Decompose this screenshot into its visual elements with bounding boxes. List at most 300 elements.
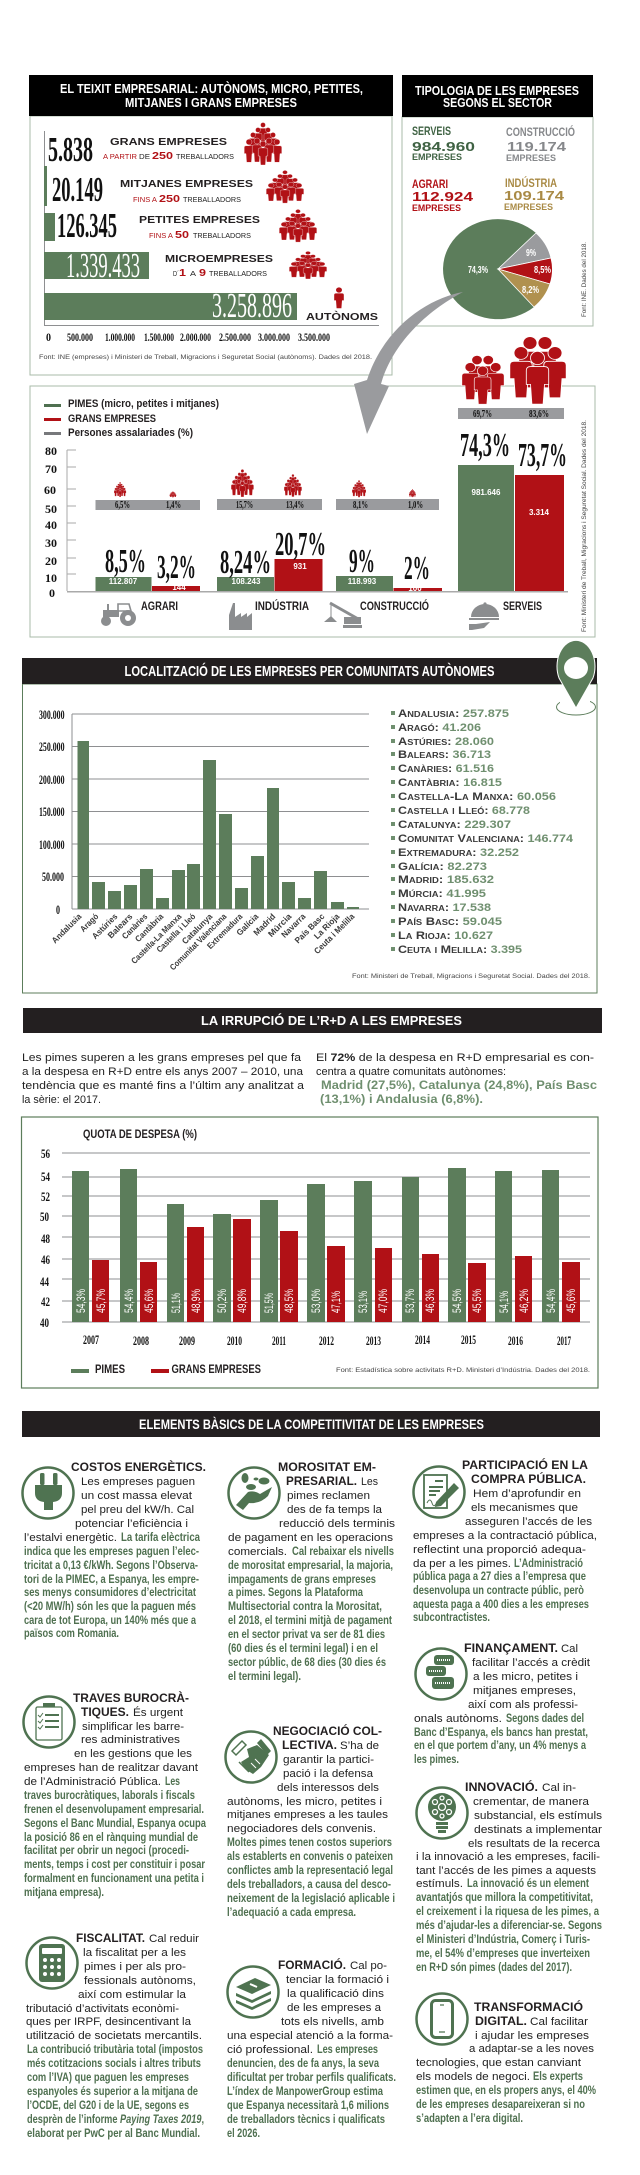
bar chart: pimes vs grans: 2007 [83, 1332, 99, 1347]
block: negociació col·lectiva: garantir la partici- [283, 1754, 374, 1766]
label: mitjanes empreses: 250 [159, 194, 181, 205]
bar chart: pimes vs grans: 45,6% [564, 1289, 578, 1313]
bar chart: empreses per comunitat: Ceuta i Melilla [312, 911, 357, 956]
block: traves burocràtiques: És urgent [133, 1706, 184, 1719]
legend [44, 398, 219, 439]
bar chart: pimes vs grans: 44 [40, 1274, 49, 1289]
stat: indústria: EMPRESES [504, 202, 553, 212]
text: intro esquerra: la sèrie: el 2017. [22, 1094, 101, 1106]
icon: crowd microempreses [289, 251, 327, 279]
icon: handshake [226, 1732, 276, 1782]
block: compra pública: Hem d’aprofundir en [473, 1488, 581, 1500]
group: indústria: 13,4% [286, 499, 304, 511]
heading band: irrupció R+D [23, 1008, 602, 1033]
block: fiscalitat: utilització de societats mercantils. [26, 2030, 202, 2042]
group: indústria: 15,7% [236, 499, 253, 511]
icon: cloche and hand [469, 602, 499, 630]
bar chart: empreses per comunitat [39, 707, 369, 972]
block: fiscalitat: FISCALITAT. [76, 1932, 145, 1945]
label: mitjanes empreses: TREBALLADORS [183, 197, 241, 204]
block: transformació digital: s’adapten a l’era digital. [416, 2111, 523, 2125]
bar chart: pimes vs grans: 54,4% [544, 1289, 558, 1313]
bar chart: pimes vs grans: 53,7% [403, 1289, 417, 1313]
group: serveis: 69,7% [473, 408, 492, 420]
block: compra pública: PARTICIPACIÓ EN LA [462, 1459, 589, 1472]
block: negociació col·lectiva: NEGOCIACIÓ COL- [273, 1725, 382, 1738]
heading: teixit empresarial: MITJANES I GRANS EMPRESES [125, 96, 297, 110]
icon: plug [22, 1468, 74, 1518]
label: grans empreses: A PARTIR [103, 154, 137, 161]
bar chart: pimes vs grans: 45,7% [94, 1289, 108, 1313]
block: negociació col·lectiva: autònoms, les micro, petites i [227, 1796, 382, 1808]
block: costos energètics: La tarifa elèctrica [121, 1530, 200, 1544]
block: morositat: MOROSITAT EM- [278, 1461, 376, 1474]
bar chart: pimes vs grans: 48,5% [282, 1289, 296, 1313]
icon: smartphone [416, 1994, 468, 2044]
list: empreses per comunitat: La Rioja: 10.627 [398, 930, 493, 942]
block: costos energètics: Les empreses paguen [81, 1476, 195, 1488]
block: morositat: el termini legal). [228, 1669, 301, 1683]
block: negociació col·lectiva: mitjanes empreses a les taules [227, 1809, 388, 1821]
list: empreses per comunitat: Madrid: 185.632 [398, 874, 494, 886]
label: grans empreses: GRANS EMPRESES [110, 136, 227, 148]
block: formació: Les empreses [317, 2042, 378, 2056]
label: grans empreses: 250 [152, 151, 174, 162]
block: fiscalitat: ques per IRPF, desincentivant la [26, 2016, 192, 2028]
block: fiscalitat: així com estimular la [78, 1989, 187, 2001]
block: innovació: crementar, de manera [473, 1796, 590, 1808]
heading band: elements bàsics: ELEMENTS BÀSICS DE LA COMPETITIVITAT DE LES EMPRESES [139, 1417, 484, 1432]
bar chart: empreses per grandària [44, 130, 379, 344]
block: traves burocràtiques: ments, temps i cost per constituir i posar [24, 1857, 205, 1871]
block: transformació digital: els models de negoci. [416, 2071, 530, 2083]
list: empreses per comunitat: Comunitat Valenciana: 146.774 [398, 833, 574, 845]
stat: construcció: EMPRESES [506, 153, 556, 163]
list: empreses per comunitat: Ceuta i Melilla: 3.395 [398, 944, 522, 956]
block: fiscalitat: tributació d’activitats econòmi- [26, 2003, 179, 2015]
block: negociació col·lectiva [226, 1725, 395, 1919]
stat: agrari [412, 177, 474, 213]
block: innovació: destinats a implementar [474, 1824, 602, 1836]
legend: PIMES [95, 1364, 125, 1376]
block: traves burocràtiques: res administratives [81, 1734, 180, 1746]
bar chart: pimes vs grans: 45,6% [142, 1289, 156, 1313]
block: traves burocràtiques [24, 1692, 206, 1899]
group: indústria: INDÚSTRIA [255, 600, 309, 613]
label: mitjanes empreses: MITJANES EMPRESES [120, 178, 253, 190]
bar chart: pimes vs grans: 2015 [461, 1332, 476, 1347]
list: empreses per comunitat: País Basc: 59.045 [398, 916, 502, 928]
y axis: 80 [45, 444, 57, 458]
block: negociació col·lectiva: als establerts en convenis o pateixen [227, 1849, 393, 1863]
block: morositat: Les [361, 1476, 378, 1488]
bar chart: empreses per grandària: 500.000 [67, 330, 93, 344]
group: agrari: 3,2% [157, 549, 196, 586]
bar chart: empreses per comunitat: Castella i Lleó [154, 911, 197, 954]
group: construcció: 2% [404, 550, 430, 587]
label: microempreses: A [190, 271, 196, 278]
pie chart: 9% [526, 247, 536, 259]
list: empreses per comunitat: Extremadura: 32.252 [398, 847, 519, 859]
list: empreses per comunitat: Canàries: 61.516 [398, 763, 494, 775]
block: compra pública: L’Administració [514, 1556, 583, 1570]
text: intro esquerra: Les pimes superen a les grans empreses pel que fa [22, 1052, 302, 1064]
icon: crowd grans empreses [244, 122, 282, 165]
block: costos energètics: potenciar l’eficiència i [75, 1518, 188, 1530]
group: construcció: 8,1% [353, 499, 368, 511]
block: morositat: a pimes. Segons la Plataforma [228, 1585, 363, 1599]
label: autònoms: AUTÒNOMS [306, 310, 378, 323]
bar chart: pimes vs grans: 53,0% [309, 1289, 323, 1313]
block: innovació [416, 1781, 602, 1974]
block: formació: una especial atenció a la forma- [227, 2030, 393, 2042]
block: negociació col·lectiva: pació i la defensa [283, 1768, 374, 1780]
block: traves burocràtiques: empreses han de realitzar davant [24, 1762, 199, 1774]
block: finançament: les pimes. [414, 1752, 459, 1766]
group: agrari: AGRARI [141, 601, 178, 613]
bar chart: empreses per comunitat: La Rioja [312, 911, 342, 941]
block: formació: tots els nivells, amb [281, 2016, 384, 2028]
heading: tipologia: TIPOLOGIA DE LES EMPRESES [415, 84, 579, 98]
label: grans empreses: TREBALLADORS [176, 154, 234, 161]
block: negociació col·lectiva: dels treballadors, a causa del desco- [227, 1877, 391, 1891]
block: formació: de les empreses a [287, 2002, 382, 2014]
block: morositat: comercials. [228, 1546, 287, 1558]
group: construcció: 9% [349, 543, 375, 580]
bar chart: empreses per comunitat: Aragó [78, 911, 100, 934]
group: agrari: 8,5% [105, 543, 146, 580]
block: fiscalitat: espanyoles és superior a la mitjana de [27, 2084, 198, 2098]
block: morositat: des de fa temps la [287, 1504, 383, 1516]
block: finançament: a les micro, petites i [473, 1671, 578, 1683]
label: microempreses: D´ [173, 271, 179, 278]
group: indústria: 8,24% [220, 544, 271, 581]
bar chart: empreses per comunitat: Extremadura [205, 911, 245, 951]
bar chart: empreses per comunitat: Catalunya [180, 911, 215, 946]
list: empreses per comunitat [391, 708, 574, 956]
block: traves burocràtiques: simplificar les barre- [82, 1721, 184, 1733]
legend: PIMES (micro, petites i mitjanes) [68, 398, 219, 410]
block: formació: L’índex de ManpowerGroup estima [227, 2084, 383, 2098]
block: fiscalitat: Cal reduir [149, 1933, 199, 1945]
label: mitjanes empreses [120, 178, 253, 205]
bar chart: pimes vs grans: 2009 [179, 1333, 195, 1348]
bar chart: pimes vs grans: 50 [40, 1209, 49, 1224]
block: traves burocràtiques: en les gestions que les [74, 1748, 192, 1760]
block: formació: FORMACIÓ. [278, 1959, 346, 1972]
stat: serveis: 984.960 [412, 139, 475, 154]
block: formació: Cal po- [350, 1960, 387, 1972]
heading: teixit empresarial [60, 81, 363, 110]
bar chart: empreses per grandària: 1.339.433 [66, 246, 140, 285]
group: indústria: 20,7% [275, 526, 326, 563]
icon: factory [229, 603, 252, 630]
bar chart: pimes vs grans: 54 [41, 1169, 50, 1184]
block: formació: ció professional. [227, 2044, 313, 2056]
bar chart: pimes vs grans [40, 1146, 590, 1348]
block: formació: el 2026. [227, 2126, 260, 2140]
icon: crowd petites empreses [279, 209, 317, 242]
bar chart: pimes vs grans: 54,4% [122, 1289, 136, 1313]
arrow: from pie to sector chart [354, 292, 463, 434]
block: traves burocràtiques: Les [165, 1774, 180, 1788]
bar chart: empreses per comunitat: Comunitat Valenciana [168, 911, 229, 972]
block: finançament: mitjanes empreses, [473, 1685, 576, 1697]
block: transformació digital [416, 1994, 596, 2125]
block: negociació col·lectiva: Moltes pimes tenen costos superiors [227, 1835, 392, 1849]
list: empreses per comunitat: Castella-La Manxa: 60.056 [398, 791, 556, 803]
stat: construcció: CONSTRUCCIÓ [506, 124, 575, 139]
bar chart: pimes vs grans: 46,3% [423, 1289, 437, 1313]
block: costos energètics: pel preu del kW/h. Cal [81, 1504, 194, 1516]
bar chart: empreses per comunitat: Castella-La Manxa [129, 911, 184, 966]
bar chart: pimes vs grans: 51,5% [262, 1293, 276, 1313]
block: transformació digital: de les empreses desapareixeran si no [416, 2097, 585, 2111]
block: morositat: de pagament en les operacions [228, 1532, 393, 1544]
bar chart: empreses per comunitat: 150.000 [39, 804, 64, 819]
block: morositat: el 2018, el termini mitjà de pagament [228, 1613, 392, 1627]
bar chart: empreses per grandària: 2.500.000 [219, 330, 251, 344]
list: empreses per comunitat: Balears: 36.713 [398, 749, 491, 761]
block: negociació col·lectiva: l’adequació a cada empresa. [227, 1905, 356, 1919]
bar chart: empreses per comunitat: 300.000 [39, 707, 64, 722]
block: transformació digital: Els experts [533, 2069, 583, 2083]
label: petites empreses: 50 [175, 230, 190, 241]
bar chart: empreses per comunitat: Madrid [251, 911, 277, 938]
bar chart: empreses per comunitat: Balears [105, 911, 135, 940]
group: construcció: 118.993 [348, 577, 377, 586]
block: costos energètics: indica que les empreses paguen l’elec- [24, 1544, 199, 1558]
block: costos energètics: COSTOS ENERGÈTICS. [71, 1461, 206, 1474]
bar chart: empreses per grandària: 1.500.000 [144, 330, 174, 344]
list: empreses per comunitat: Andalusia: 257.875 [398, 708, 509, 720]
y axis [44, 444, 76, 600]
panel: quota de despesa [22, 1117, 598, 1388]
block: innovació: en R+D són pimes (dades del 2017). [416, 1960, 572, 1974]
group: agrari: 144 [172, 583, 186, 592]
bar chart: empreses per comunitat: 100.000 [39, 837, 64, 852]
block: transformació digital: i ajudar les empreses [475, 2030, 589, 2042]
block: innovació: La innovació és un element [467, 1876, 589, 1890]
bar chart: empreses per comunitat: Navarra [279, 911, 308, 940]
label: microempreses: 1 [179, 268, 187, 279]
text: intro dreta: Madrid (27,5%), Catalunya (24,8%), País Basc [321, 1080, 598, 1092]
icon: books [228, 1966, 278, 2018]
block: costos energètics: l’estalvi energètic. [24, 1532, 117, 1544]
bar chart: pimes vs grans: 42 [41, 1294, 50, 1309]
bar chart: empreses per comunitat: Andalusia [49, 911, 84, 945]
bar chart: pimes vs grans: 49,8% [235, 1289, 249, 1313]
block: negociació col·lectiva: neixement de la legislació aplicable i [227, 1891, 395, 1905]
bar chart: pimes vs grans: 2011 [272, 1333, 286, 1348]
heading: tipologia: SEGONS EL SECTOR [443, 96, 552, 110]
pie chart [443, 219, 552, 319]
block: finançament: Banc d’Espanya, els bancs han prestat, [414, 1725, 588, 1739]
stat: indústria: INDÚSTRIA [505, 175, 557, 190]
label: petites empreses: FINS A [149, 233, 173, 240]
panel: teixit empresarial [29, 75, 393, 375]
block: costos energètics: països com Romania. [24, 1626, 119, 1640]
block: traves burocràtiques: frenen el desenvolupament empresarial. [24, 1802, 204, 1816]
text: intro dreta [316, 1052, 598, 1106]
stat: agrari: EMPRESES [412, 203, 461, 213]
group: indústria [217, 469, 326, 630]
y axis: 10 [45, 571, 57, 585]
block: fiscalitat: fessionals autònoms, [84, 1975, 196, 1987]
block: traves burocràtiques: traves burocràtiques, laborals i fiscals [24, 1788, 195, 1802]
block: compra pública: da per a les pimes. [413, 1558, 511, 1570]
bar chart: empreses per grandària: 0 [46, 330, 51, 344]
legend: Persones assalariades (%) [68, 427, 193, 439]
block: traves burocràtiques: mitjana empresa). [24, 1885, 104, 1899]
stat: indústria: 109.174 [504, 188, 565, 203]
stat: serveis: EMPRESES [412, 152, 462, 162]
bar chart: empreses per comunitat: País Basc [292, 911, 327, 945]
bar chart: pimes vs grans: 40 [40, 1315, 49, 1330]
block: costos energètics [22, 1461, 206, 1640]
bar chart: empreses per comunitat: Galícia [234, 911, 261, 938]
block: traves burocràtiques: TIQUES. [81, 1706, 129, 1719]
bar chart: empreses per grandària: 5.838 [48, 130, 93, 169]
y axis: 30 [45, 536, 57, 550]
source note: Font: Ministeri de Treball, Migracions i Seguretat Social. Dades del 2018. [582, 420, 588, 632]
bar chart: pimes vs grans: 54,1% [497, 1291, 511, 1313]
block: compra pública: desenvolupa un contracte públic, però [413, 1583, 584, 1597]
block: morositat: Cal rebaixar els nivells [292, 1544, 394, 1558]
heading: localització: LOCALITZACIÓ DE LES EMPRESES PER COMUNITATS AUTÒNOMES [124, 662, 494, 680]
label: grans empreses: DE [139, 154, 150, 161]
block: traves burocràtiques: facilitat per obrir un negoci (procedi- [24, 1843, 189, 1857]
group: serveis [458, 337, 567, 630]
source note: Font: INE (empreses) i Ministeri de Treball, Migracions i Seguretat Social (autònoms). Dades del 2018. [39, 355, 372, 361]
block: finançament: en el que portem d’any, un 4% menys a [414, 1738, 586, 1752]
block: traves burocràtiques: la posició 86 en el rànquing mundial de [24, 1830, 198, 1844]
block: finançament: facilitar l’accés a crèdit [472, 1657, 591, 1669]
group: construcció: CONSTRUCCIÓ [360, 600, 429, 613]
bar chart: empreses per comunitat: 0 [56, 902, 60, 917]
source note: Font: INE. Dades del 2018. [582, 242, 588, 317]
block: costos energètics: tricitat a 0,13 €/kWh. Segons l’Observa- [24, 1558, 198, 1572]
block: transformació digital: a adaptar-se a les noves [469, 2043, 594, 2055]
source note: Font: Estadística sobre activitats R+D. Ministeri d’Indústria. Dades del 2018. [336, 1368, 590, 1374]
icon: tractor [101, 604, 136, 626]
block: morositat [228, 1461, 395, 1683]
block: innovació: Cal in- [542, 1782, 576, 1794]
bar chart: empreses per comunitat: 250.000 [39, 739, 64, 754]
group: construcció: 1,0% [408, 499, 423, 511]
text: intro dreta: El 72% de la despesa en R+D empresarial es con- [316, 1052, 594, 1064]
panel: pimes i grans empreses per sector [30, 337, 595, 637]
bar chart: empreses per comunitat: Astúries [90, 911, 120, 941]
label: microempreses: TREBALLADORS [209, 271, 267, 278]
pie chart: 8,2% [522, 284, 539, 296]
bar chart: pimes vs grans: 53,1% [356, 1291, 370, 1313]
block: morositat: impagaments de grans empreses [228, 1572, 376, 1586]
bar chart: pimes vs grans: 2008 [133, 1333, 149, 1348]
bar chart: pimes vs grans: 54,3% [74, 1289, 88, 1313]
text: intro esquerra [22, 1052, 305, 1106]
label: microempreses: MICROEMPRESES [165, 253, 273, 265]
bar chart: pimes vs grans: 2016 [508, 1333, 523, 1348]
block: costos energètics: tori de la PIMEC, a Espanya, les empre- [24, 1572, 199, 1586]
bar chart: empreses per grandària: 3.258.896 [212, 286, 292, 325]
heading band: irrupció R+D: LA IRRUPCIÓ DE L’R+D A LES EMPRESES [201, 1013, 462, 1028]
label: petites empreses [139, 214, 260, 241]
list: empreses per comunitat: Cantàbria: 16.815 [398, 777, 502, 789]
group: serveis: 74,3% [460, 427, 510, 464]
group: construcció [324, 480, 442, 628]
heading: tipologia [415, 84, 579, 110]
block: fiscalitat: l’OCDE, del G20 i de la UE, segons es [27, 2098, 189, 2112]
icon: document and pen [414, 1466, 464, 1518]
bar chart: pimes vs grans: 2017 [557, 1333, 571, 1348]
bar chart: pimes vs grans: 54,5% [450, 1289, 464, 1313]
block: morositat: (60 dies és el termini legal) i en el [228, 1641, 378, 1655]
block: compra pública: empreses a la contractació pública, [413, 1530, 597, 1542]
group: serveis: SERVEIS [503, 601, 542, 613]
label: petites empreses: PETITES EMPRESES [139, 214, 260, 226]
block: formació: denuncien, des de fa anys, la seva [227, 2056, 379, 2070]
legend [71, 1364, 261, 1376]
block: morositat: Multisectorial contra la Morositat, [228, 1599, 382, 1613]
bar chart: pimes vs grans: 48,9% [189, 1289, 203, 1313]
block: negociació col·lectiva: S’ha de [340, 1740, 379, 1752]
bar chart: empreses per comunitat: Canàries [120, 911, 150, 941]
bar chart: empreses per comunitat: Múrcia [266, 911, 294, 939]
block: morositat: sector públic, de 68 dies (30 dies és [228, 1655, 386, 1669]
block: morositat: pimes reclamen [287, 1490, 370, 1502]
group: agrari [96, 482, 200, 626]
icon: coins [416, 1648, 466, 1700]
bar chart: empreses per comunitat: 200.000 [39, 772, 64, 787]
block: innovació: avantatjós que millora la competitivitat, [416, 1890, 593, 1904]
group: agrari: 6,5% [115, 499, 130, 511]
list: empreses per comunitat: Galícia: 82.273 [398, 861, 487, 873]
block: formació: que Espanya necessitarà 1,6 milions [227, 2098, 389, 2112]
block: fiscalitat: desprèn de l’informe Paying Taxes 2019, [27, 2112, 204, 2126]
bar chart: empreses per grandària: 2.000.000 [180, 330, 211, 344]
block: fiscalitat: més cotitzacions socials i altres tributs [27, 2056, 201, 2070]
list: empreses per comunitat: Castella i Lleó: 68.778 [398, 805, 530, 817]
block: compra pública: subcontractistes. [413, 1610, 490, 1624]
block: innovació: INNOVACIÓ. [465, 1781, 538, 1794]
block: formació [227, 1959, 396, 2140]
icon: crane [324, 603, 362, 628]
block: innovació: me, el 54% d’empreses que inverteixen [416, 1946, 590, 1960]
block: finançament [414, 1642, 591, 1766]
block: transformació digital: DIGITAL. [475, 2015, 527, 2028]
group: serveis: 83,6% [529, 408, 549, 420]
block: formació: de treballadors tècnics i qualificats [227, 2112, 385, 2126]
bar chart: pimes vs grans: 51,1% [169, 1293, 183, 1313]
block: innovació: substancial, els estímuls [474, 1810, 602, 1822]
bar chart: pimes vs grans: 47,1% [329, 1291, 343, 1313]
heading band: elements bàsics [22, 1411, 600, 1437]
list: empreses per comunitat: Navarra: 17.538 [398, 902, 491, 914]
block: compra pública: aquesta paga a 400 dies a les empreses [413, 1597, 589, 1611]
block: negociació col·lectiva: conflictes amb la representació legal [227, 1863, 393, 1877]
block: traves burocràtiques: formalment en funcionament una petita i [24, 1871, 204, 1885]
block: negociació col·lectiva: LECTIVA. [282, 1739, 337, 1752]
bar chart: pimes vs grans: 52 [41, 1189, 50, 1204]
icon: light bulb [416, 1788, 468, 1838]
panel: tipologia per sector [402, 75, 593, 326]
icon: calculator [26, 1938, 78, 1988]
stat: serveis: SERVEIS [412, 124, 451, 138]
bar chart: pimes vs grans: 47,0% [376, 1289, 390, 1313]
list: empreses per comunitat: Múrcia: 41.995 [398, 888, 486, 900]
pie chart: 8,5% [534, 264, 551, 276]
